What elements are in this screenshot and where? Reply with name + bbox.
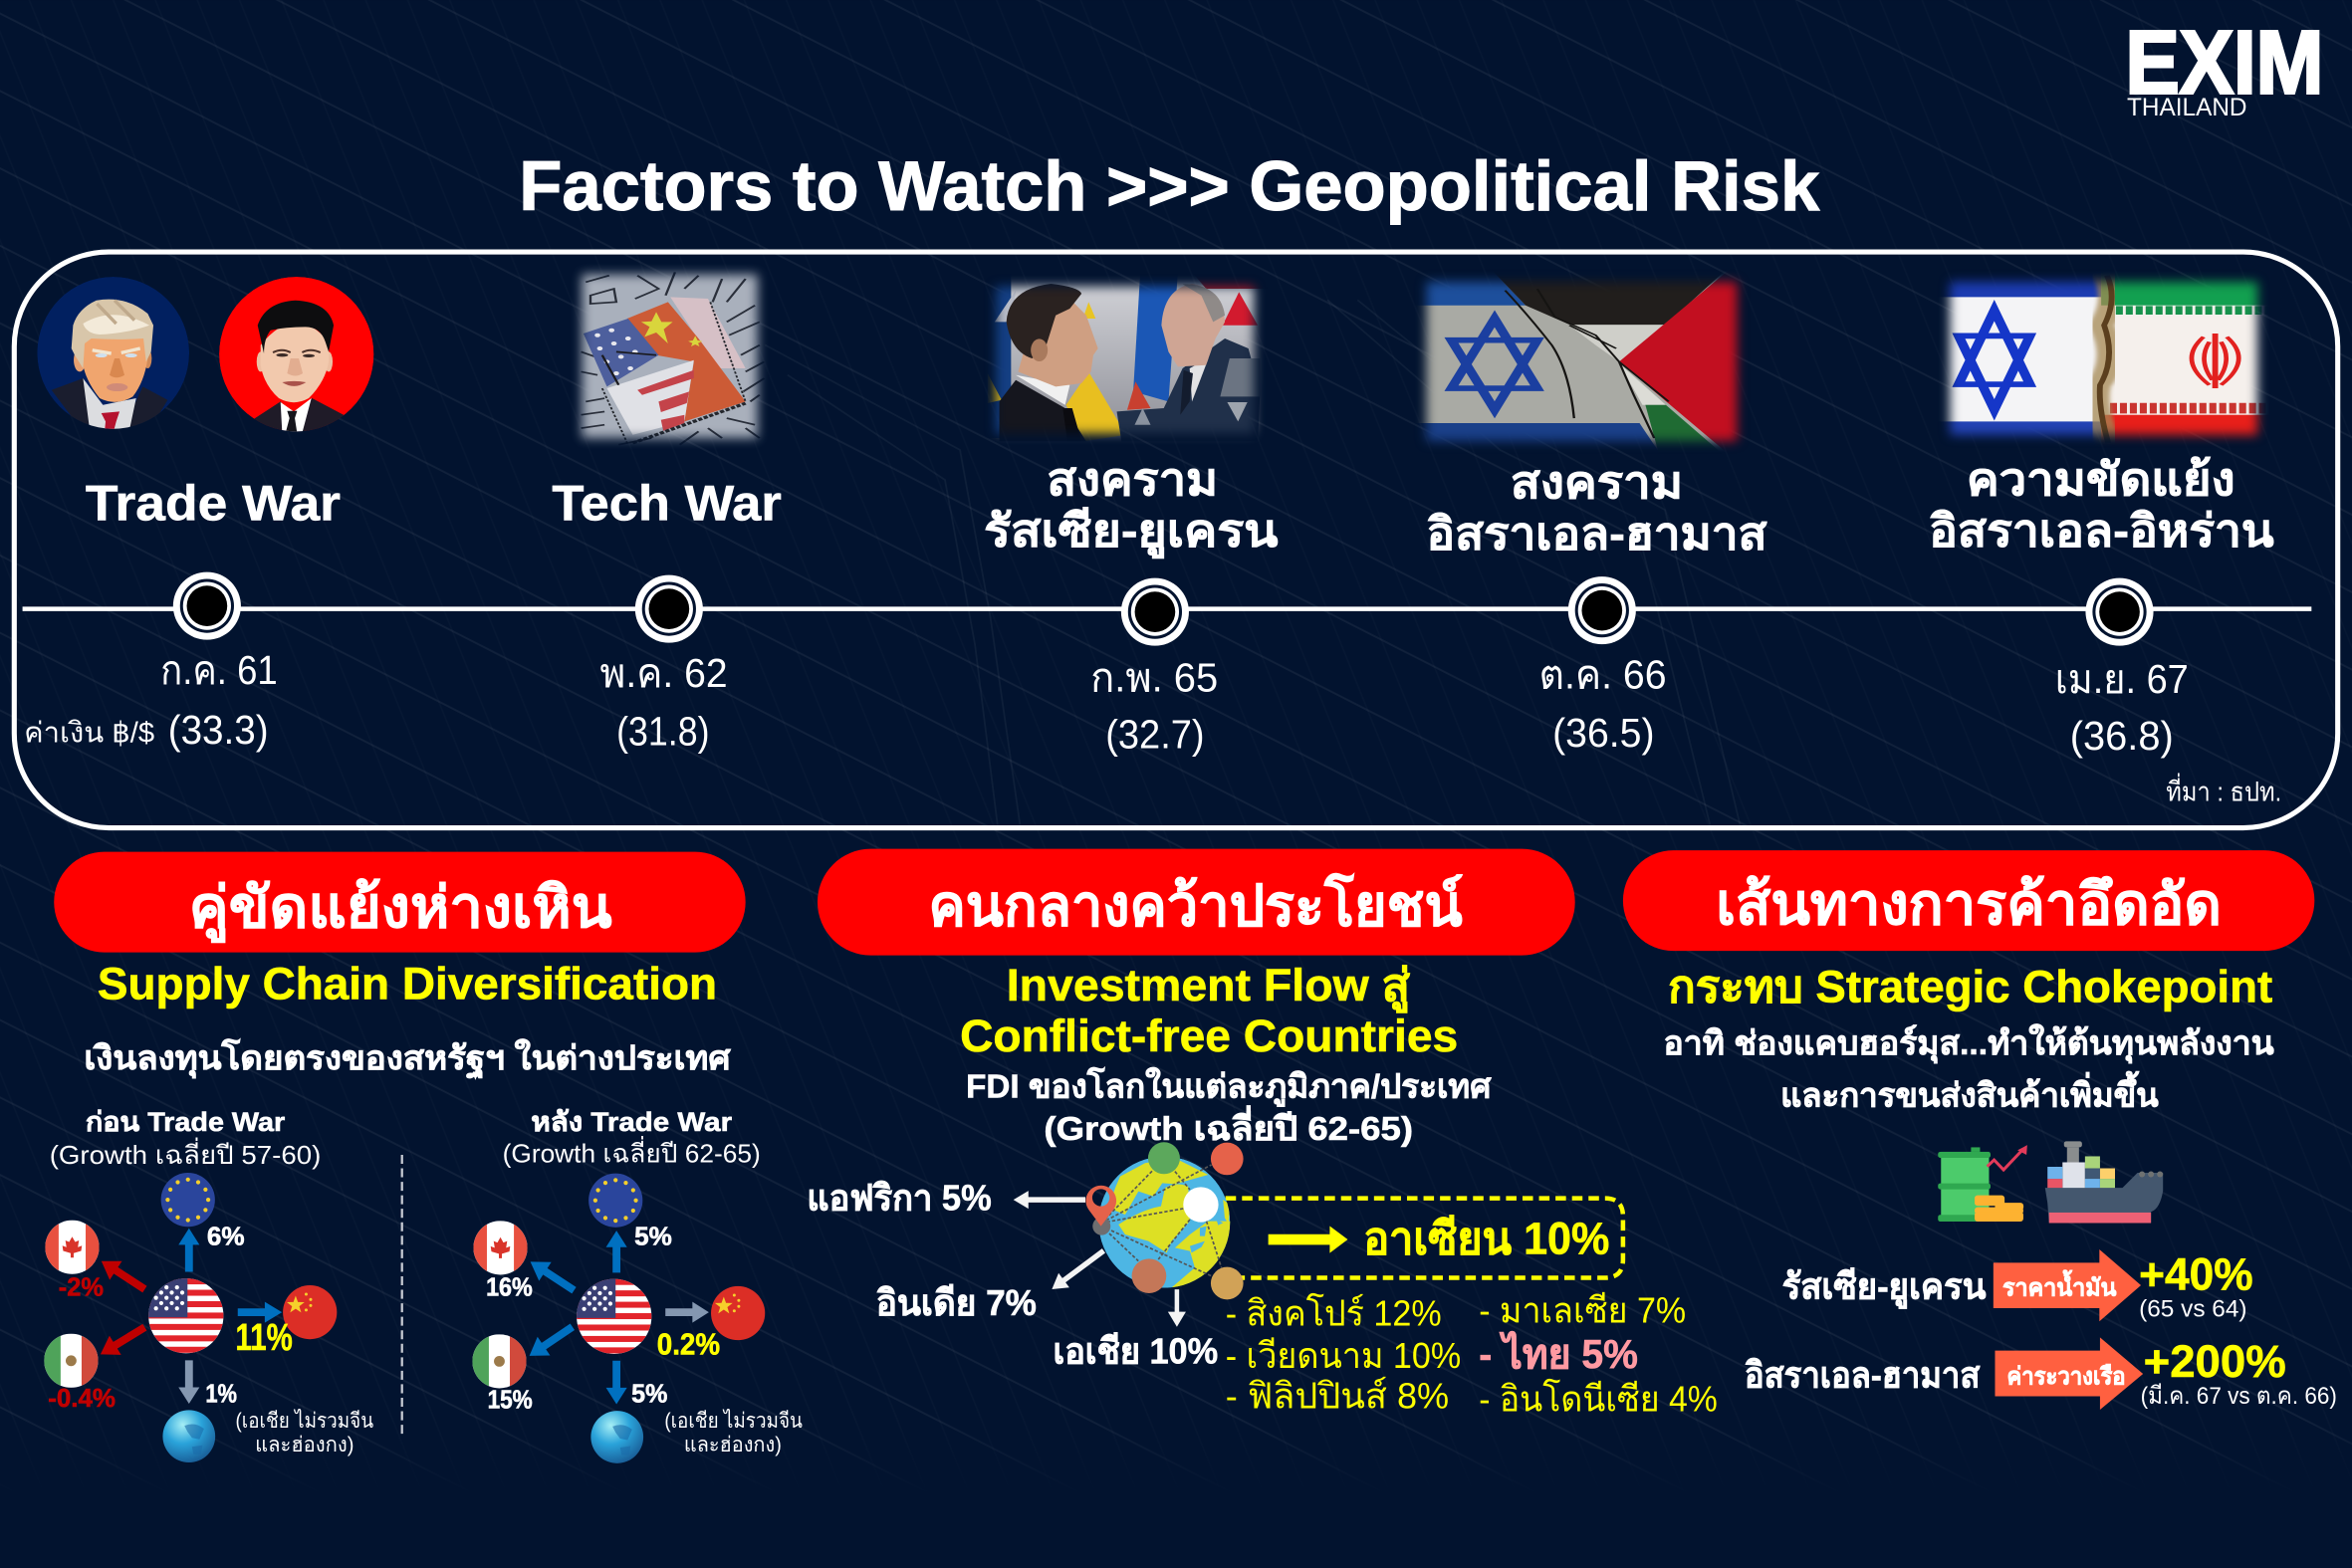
arrow: to EU: [178, 1229, 199, 1271]
heading: Trade War: Trade War: [86, 476, 341, 532]
icon: container ship: [2045, 1141, 2163, 1223]
heading: Israel-Iran conflict: อิสราเอล-อิหร่าน: [1929, 505, 2274, 556]
ASEAN country list: - ฟิลิปปินส์ 8%: [1226, 1376, 1449, 1417]
values: 15%: [488, 1387, 533, 1415]
ASEAN country list: - สิงคโปร์ 12%: [1226, 1293, 1442, 1334]
marker 2: [635, 575, 703, 643]
stat: +200%: +200%: [2144, 1336, 2286, 1387]
image: Trump portrait: [37, 277, 189, 433]
label: Africa: แอฟริกา 5%: [807, 1178, 992, 1219]
date and rate 1: ก.ค. 61: [160, 647, 278, 693]
values: 1%: [205, 1381, 237, 1409]
arrow: oil price: ราคาน้ำมัน: [2002, 1269, 2117, 1302]
arrow: to Canada: [96, 1251, 151, 1299]
stat: +40%: [2139, 1249, 2253, 1323]
arrow: to Canada: [524, 1252, 581, 1300]
divider: [401, 1155, 403, 1434]
chart heading: (Growth เฉลี่ยปี 57-60): [50, 1137, 321, 1170]
values: -0.4%: [48, 1385, 116, 1413]
description: [1664, 1023, 2274, 1115]
label: Russia-Ukraine: รัสเซีย-ยูเครน: [1782, 1266, 1987, 1310]
description: (Growth เฉลี่ยปี 62-65): [1044, 1105, 1413, 1148]
marker 4: [1568, 576, 1636, 644]
heading: Israel-Hamas war: อิสราเอล-ฮามาส: [1427, 508, 1767, 559]
values: [486, 1223, 720, 1415]
stat: +200%: [2141, 1336, 2337, 1410]
stat: +40%: +40%: [2139, 1249, 2253, 1300]
heading: Tech War: Tech War: [552, 476, 782, 532]
description: และการขนส่งสินค้าเพิ่มขึ้น: [1780, 1071, 2159, 1115]
pill heading: คู่ขัดแย้งห่างเหิน: [189, 876, 612, 943]
chart heading: ก่อน Trade War: [86, 1106, 286, 1137]
arrow: to EU: [606, 1231, 627, 1272]
values: 5%: [631, 1381, 668, 1409]
date and rate 1: [24, 647, 278, 753]
logo: EXIM Thailand: THAILAND: [2127, 95, 2247, 121]
values: 6%: [207, 1223, 245, 1250]
arrow: to Asia: [178, 1360, 199, 1404]
Asia note: (เอเชีย ไม่รวมจีน: [664, 1409, 803, 1433]
subheading: [960, 960, 1458, 1061]
title: Factors to Watch >>> Geopolitical Risk: [519, 147, 1820, 226]
label: Israel-Hamas: อิสราเอล-ฮามาส: [1745, 1354, 1981, 1395]
flag: Canada: [45, 1221, 100, 1274]
pill heading: [818, 849, 1575, 956]
description: [966, 1067, 1492, 1148]
arrow: freight rate: [1995, 1337, 2143, 1410]
ASEAN country list: - เวียดนาม 10%: [1226, 1335, 1461, 1376]
arrow: freight rate: ค่าระวางเรือ: [2007, 1363, 2126, 1390]
arrow: oil price: [1994, 1249, 2141, 1321]
chart: before trade war: [44, 1106, 373, 1462]
arrow: to India: [1047, 1243, 1109, 1296]
label: Asia: เอเชีย 10%: [1053, 1330, 1218, 1371]
heading: Israel-Hamas war: สงคราม: [1511, 457, 1683, 508]
panel: strategic chokepoint: [1623, 850, 2337, 1410]
date and rate 1: ค่าเงิน ฿/$: [24, 718, 154, 750]
ASEAN country list: - ไทย 5%: [1479, 1330, 1638, 1377]
flag: Mexico: [44, 1334, 99, 1388]
panel: timeline: [14, 252, 2338, 828]
arrow: to China: [665, 1302, 709, 1323]
arrow: to China: [238, 1302, 282, 1323]
panel: supply chain diversification: [44, 852, 803, 1463]
marker 1: [173, 572, 241, 640]
values: 11%: [236, 1316, 293, 1358]
image: Zelensky and Putin: [988, 278, 1263, 441]
date and rate 5: เม.ย. 67: [2055, 656, 2189, 702]
description: FDI ของโลกในแต่ละภูมิภาค/ประเทศ: [966, 1067, 1492, 1108]
heading: Israel-Hamas war: [1427, 457, 1767, 559]
date and rate 5: [2055, 656, 2189, 759]
image: Israel and Palestine flags: [1418, 274, 1746, 450]
arrow: to Asia: [606, 1361, 627, 1404]
date and rate 4: [1539, 651, 1667, 756]
ASEAN country list: - อินโดนีเซีย 4%: [1479, 1379, 1718, 1420]
arrow: to Mexico: [95, 1318, 150, 1364]
chart heading: [503, 1106, 761, 1168]
icon: globe network: [1085, 1142, 1244, 1299]
values: -2%: [59, 1274, 104, 1302]
label: India: อินเดีย 7%: [876, 1282, 1037, 1323]
label: ASEAN: อาเซียน 10%: [1363, 1213, 1609, 1263]
date and rate 2: พ.ค. 62: [600, 650, 728, 696]
Asia note: [664, 1409, 803, 1456]
subheading: Supply Chain Diversification: [98, 958, 717, 1008]
values: 16%: [486, 1274, 533, 1302]
date and rate 3: ก.พ. 65: [1090, 654, 1218, 700]
chart: after trade war: [472, 1106, 803, 1463]
icon: Asia globe: [590, 1411, 643, 1463]
flag: China: [711, 1286, 765, 1340]
timeline axis: [23, 607, 2311, 610]
flag: USA: [148, 1278, 223, 1353]
description: อาทิ ช่องแคบฮอร์มุส...ทำให้ต้นทุนพลังงาน: [1664, 1023, 2274, 1064]
stat: +40%: (65 vs 64): [2139, 1296, 2247, 1323]
description: เงินลงทุนโดยตรงของสหรัฐฯ ในต่างประเทศ: [84, 1038, 732, 1079]
pill heading: [1623, 850, 2314, 951]
chart heading: (Growth เฉลี่ยปี 62-65): [503, 1135, 761, 1168]
date and rate 2: [600, 650, 728, 755]
pill heading: คนกลางคว้าประโยชน์: [928, 871, 1463, 938]
icon: Asia globe: [162, 1410, 215, 1462]
ASEAN country list: - มาเลเซีย 7%: [1479, 1290, 1686, 1331]
logo: EXIM Thailand: EXIM: [2126, 12, 2323, 112]
subheading: Conflict-free Countries: [960, 1010, 1458, 1061]
date and rate 3: [1090, 654, 1218, 758]
pill heading: เส้นทางการค้าอึดอัด: [1716, 873, 2222, 937]
pill heading: [54, 852, 746, 953]
values: 0.2%: [657, 1328, 720, 1361]
chart heading: [50, 1106, 321, 1170]
flag: China: [283, 1285, 337, 1339]
source note: ที่มา : ธปท.: [2166, 773, 2281, 806]
panel: investment flow: [807, 849, 1718, 1420]
heading: Israel-Iran conflict: ความขัดแย้ง: [1967, 454, 2235, 505]
date and rate 3: (32.7): [1105, 712, 1205, 758]
image: Tech War chip flags: [574, 267, 766, 446]
chart heading: หลัง Trade War: [531, 1106, 733, 1137]
image: Israel and Iran flags: [1935, 269, 2276, 448]
subheading: Investment Flow สู่: [1007, 960, 1410, 1013]
Asia note: (เอเชีย ไม่รวมจีน: [236, 1409, 373, 1433]
date and rate 5: (36.8): [2070, 713, 2174, 759]
flag: Canada: [473, 1221, 528, 1274]
marker 5: [2085, 578, 2154, 646]
image: Xi portrait: [219, 277, 373, 433]
marker 3: [1121, 578, 1189, 646]
heading: Russia-Ukraine war: [984, 454, 1279, 559]
values: [48, 1223, 293, 1413]
heading: Israel-Iran conflict: [1929, 454, 2274, 556]
dashed ASEAN callout box: [1226, 1199, 1623, 1277]
date and rate 4: ต.ค. 66: [1539, 651, 1667, 697]
date and rate 4: (36.5): [1552, 710, 1655, 756]
Asia note: [236, 1409, 373, 1456]
heading: Russia-Ukraine war: รัสเซีย-ยูเครน: [984, 505, 1279, 559]
date and rate 1: (33.3): [168, 707, 269, 753]
Asia note: และฮ่องกง): [684, 1434, 782, 1456]
flag: EU: [588, 1174, 642, 1228]
stat: +200%: (มี.ค. 67 vs ต.ค. 66): [2141, 1383, 2337, 1410]
date and rate 2: (31.8): [616, 709, 710, 755]
subheading: กระทบ Strategic Chokepoint: [1668, 961, 2272, 1011]
icon: oil barrel and coins: [1938, 1145, 2027, 1222]
heading: Russia-Ukraine war: สงคราม: [1047, 454, 1218, 505]
flag: EU: [161, 1173, 215, 1227]
arrow: to Africa: [1014, 1191, 1085, 1209]
arrow: to ASEAN: [1269, 1227, 1347, 1253]
Asia note: และฮ่องกง): [255, 1434, 354, 1456]
arrow: to Asia: [1168, 1289, 1186, 1327]
values: 5%: [634, 1223, 672, 1250]
ASEAN country list: [1226, 1290, 1718, 1420]
arrow: to Mexico: [523, 1317, 579, 1365]
flag: Mexico: [472, 1334, 527, 1388]
flag: USA: [577, 1279, 651, 1354]
